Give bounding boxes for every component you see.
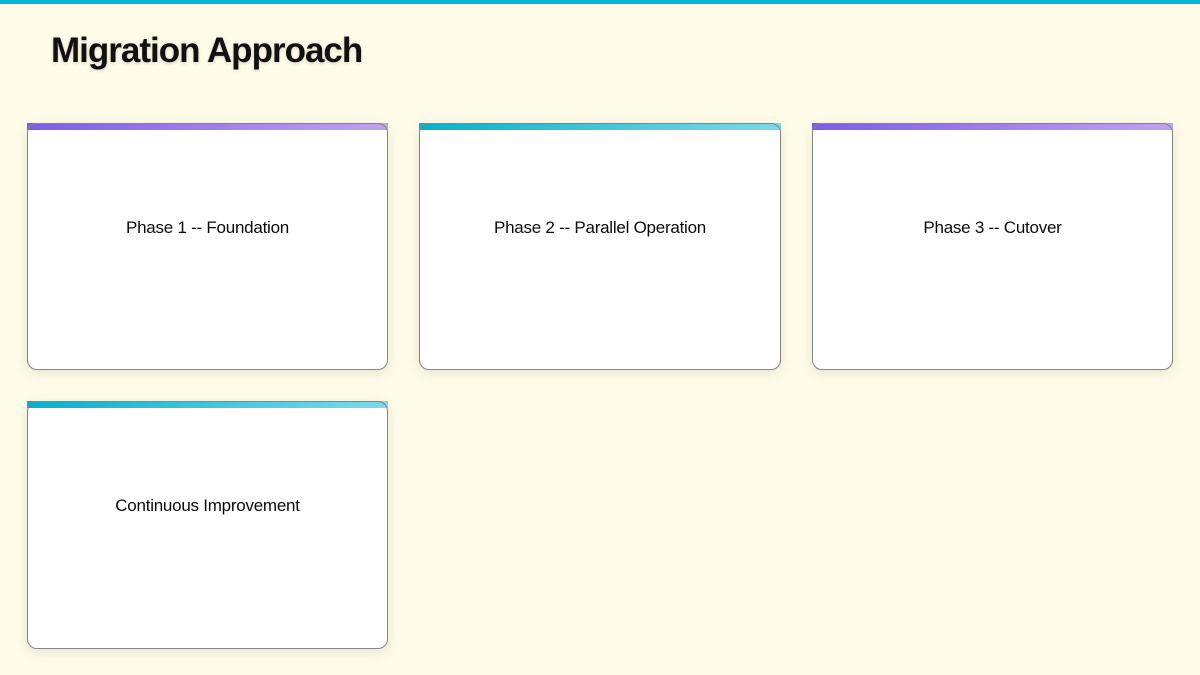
label: phase 1: Phase 1 -- Foundation [126,218,289,237]
title: Migration Approach [51,31,362,70]
panel: continuous improvement [27,401,388,649]
panel: phase 1 [27,123,388,370]
top accent bar [0,0,1200,4]
accent bar: continuous improvement [27,401,388,408]
panel: phase 2 [419,123,781,370]
accent bar: phase 1 [27,123,388,130]
accent bar: phase 2 [419,123,781,130]
label: phase 3: Phase 3 -- Cutover [923,218,1062,237]
accent bar: phase 3 [812,123,1173,130]
label: phase 2: Phase 2 -- Parallel Operation [494,218,706,237]
panel: phase 3 [812,123,1173,370]
label: continuous improvement: Continuous Improvement [115,496,300,515]
